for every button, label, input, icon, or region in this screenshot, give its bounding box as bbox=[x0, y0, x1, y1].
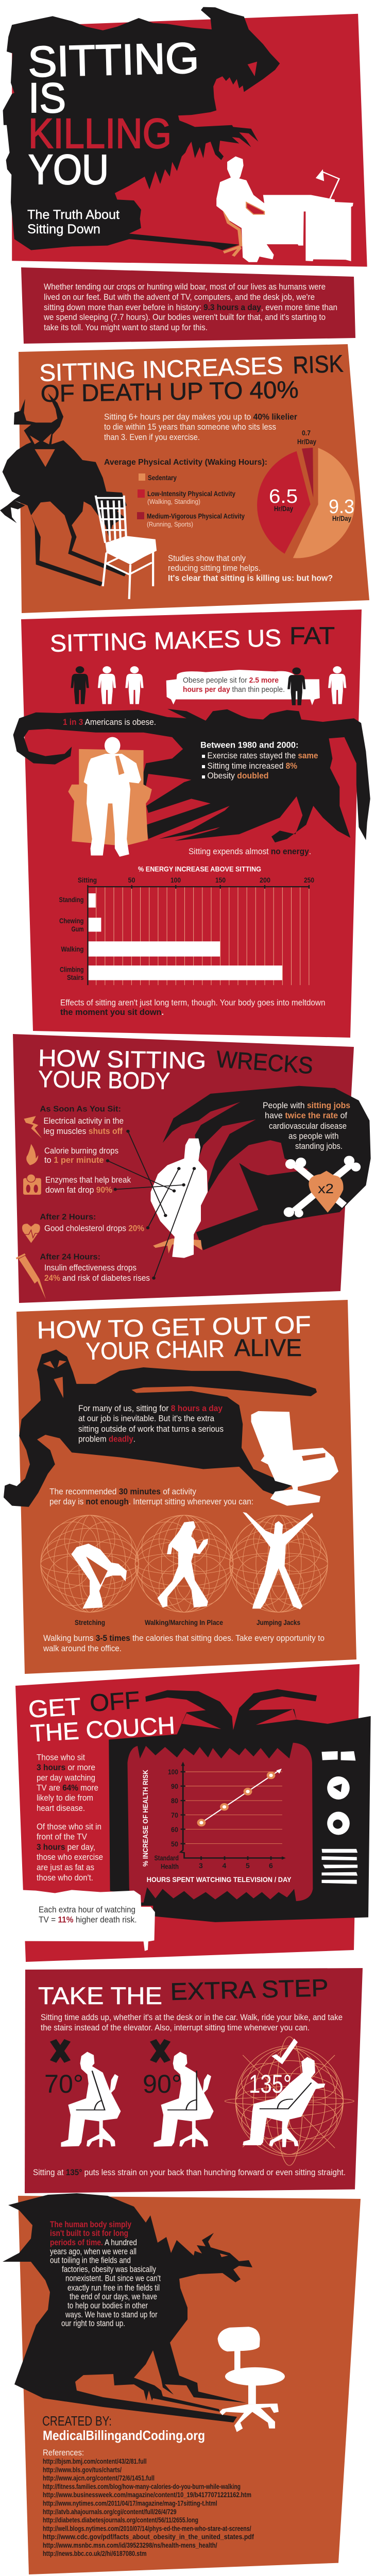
dragon text: isn't built to sit for long bbox=[50, 2229, 128, 2238]
chart: energy increase labels: Climbing bbox=[60, 965, 83, 974]
text: exercise: those who don't. bbox=[37, 1873, 93, 1883]
dragon text bbox=[50, 2220, 161, 2328]
references: http://www.msnbc.msn.com/id/39523298/ns/health-mens_health/ bbox=[43, 2541, 217, 2549]
pie: medium-vigorous bbox=[302, 448, 313, 498]
title text: SITTING bbox=[27, 33, 199, 86]
references: http://www.cdc.gov/pdf/facts_about_obesity_in_the_united_states.pdf bbox=[43, 2533, 254, 2541]
text: three hours: heart disease. bbox=[37, 1804, 85, 1813]
chart: energy increase labels: % ENERGY INCREASE ABOVE SITTING bbox=[138, 866, 261, 873]
illustration: arm gap bbox=[246, 202, 264, 214]
section heading bbox=[38, 1974, 329, 2009]
pie: low intensity bbox=[257, 451, 311, 554]
panel: sitting makes us fat bbox=[13, 609, 370, 1038]
text: walking burns bbox=[43, 1634, 325, 1653]
icon: lightning bbox=[24, 1116, 42, 1139]
icon: syringe bbox=[16, 1254, 46, 1299]
illustration: black claw bbox=[163, 1086, 371, 1250]
chart: energy increase labels: Gum bbox=[71, 925, 83, 933]
dragon text: periods of time. A hundred bbox=[50, 2238, 137, 2247]
intro text bbox=[41, 2013, 343, 2032]
text: after 2 hours bbox=[40, 1213, 144, 1233]
legend: (Running, Sports) bbox=[147, 520, 193, 528]
body text: likelihood: than 3. Even if you exercise. bbox=[104, 433, 200, 442]
pattern: three spirograph circles bbox=[41, 1515, 328, 1612]
subtitle: Sitting Down bbox=[27, 222, 100, 236]
figure: stretching bbox=[71, 1544, 127, 1608]
text: three hours: per day watching bbox=[37, 1773, 95, 1783]
text: walking burns: Walking burns 3-5 times the calories that sitting does. Take every opportunity to bbox=[43, 1634, 325, 1643]
text: three hours: likely to die from bbox=[37, 1793, 93, 1803]
references: http://www.businessweek.com/magazine/content/10_19/b4177071221162.htm bbox=[43, 2491, 251, 2499]
text: sitting jobs: cardiovascular disease bbox=[269, 1122, 347, 1131]
panel: title hero bbox=[3, 7, 367, 267]
pie labels: 0.7 bbox=[302, 429, 311, 437]
illustration: crossbones bbox=[284, 1156, 361, 1217]
exercise labels bbox=[75, 1618, 300, 1626]
references: http://fitness.families.com/blog/how-many-calories-do-you-burn-while-walking bbox=[43, 2483, 241, 2490]
man's bullet list on beast bbox=[200, 741, 318, 781]
title text bbox=[27, 33, 199, 193]
illustration: desk lamp bbox=[316, 169, 339, 199]
section heading: WRECKS bbox=[215, 1045, 314, 1079]
text: eight hours a day: at our job is inevitable. But it's the extra bbox=[78, 1414, 215, 1423]
line chart bbox=[181, 1761, 286, 1860]
references bbox=[43, 2448, 254, 2557]
man's bullet list on beast: Exercise rates stayed the same bbox=[207, 751, 318, 760]
illustration: black scorpion beast bbox=[13, 709, 370, 842]
text: exercise: are just as fat as bbox=[37, 1863, 94, 1872]
bar: standing bbox=[89, 893, 96, 908]
panel: take the extra step bbox=[25, 1968, 363, 2193]
section heading: OFF bbox=[89, 1686, 141, 1717]
chart: energy increase labels: Stairs bbox=[67, 973, 84, 981]
illustration: white chair bbox=[96, 496, 157, 599]
body text: studies: reducing sitting time helps. bbox=[168, 564, 261, 573]
pie labels bbox=[269, 429, 354, 522]
panel: closing and credits bbox=[3, 2193, 361, 2574]
intro text bbox=[43, 282, 337, 332]
angle labels: 70° bbox=[44, 2070, 83, 2098]
section heading bbox=[37, 1311, 311, 1365]
pie labels: 9.3 bbox=[329, 496, 354, 518]
angle labels: 90° bbox=[143, 2070, 182, 2098]
subtitle bbox=[27, 208, 120, 236]
white drip callout bbox=[22, 1890, 155, 1951]
text: sitting jobs bbox=[263, 1101, 350, 1151]
section heading: TAKE THE bbox=[38, 1982, 162, 2009]
angle labels: 135° bbox=[249, 2070, 292, 2098]
dragon text: The human body simply bbox=[50, 2220, 132, 2229]
dragon text: our right to stand up. bbox=[61, 2319, 125, 2328]
tv screen bbox=[127, 1743, 313, 1903]
credit: CREATED BY: bbox=[42, 2413, 112, 2429]
body text: studies: Studies show that only bbox=[168, 554, 246, 563]
dragon text: nonexistent. But since we can't bbox=[65, 2274, 161, 2283]
text: thirty minutes: The recommended 30 minutes of activity bbox=[49, 1487, 197, 1496]
chart labels: HOURS SPENT WATCHING TELEVISION / DAY bbox=[147, 1875, 292, 1884]
pie labels: 6.5 bbox=[269, 486, 298, 507]
section heading bbox=[38, 1044, 314, 1094]
illustration: seated man bbox=[84, 737, 141, 857]
body text: studies bbox=[168, 554, 333, 583]
pie labels: Hr/Day bbox=[297, 437, 316, 446]
chart: energy increase labels bbox=[59, 866, 314, 981]
text: as soon as you sit: to 1 per minute bbox=[44, 1156, 104, 1165]
dragon text: the end of our days, we have bbox=[70, 2292, 157, 2301]
chart labels: 6 bbox=[269, 1861, 273, 1870]
chart labels: Standard bbox=[155, 1854, 179, 1862]
chart labels: 50 bbox=[171, 1840, 178, 1848]
legend: Low-Intensity Physical Activity bbox=[147, 489, 235, 498]
text: exercise bbox=[37, 1822, 103, 1883]
text: three hours: 3 hours or more bbox=[37, 1763, 95, 1772]
intro text: the stairs instead of the elevator. Also, interrupt sitting time whenever you can. bbox=[41, 2023, 310, 2032]
text: as soon as you sit: Electrical activity in the bbox=[43, 1116, 124, 1126]
text: as soon as you sit: As Soon As You Sit: bbox=[40, 1105, 121, 1114]
text: three hours: Those who sit bbox=[37, 1753, 85, 1762]
chart: energy increase labels: 200 bbox=[260, 876, 270, 884]
pie labels: Hr/Day bbox=[332, 514, 351, 522]
chart labels: 60 bbox=[171, 1825, 178, 1834]
intro text: take its toll. You might want to stand up for this. bbox=[44, 323, 208, 332]
chart labels: 90 bbox=[171, 1782, 178, 1790]
text: after 2 hours: After 2 Hours: bbox=[40, 1213, 96, 1222]
body text: effects: Effects of sitting aren't just long term, though. Your body goes into meltdown bbox=[60, 998, 326, 1008]
section heading: EXTRA STEP bbox=[170, 1974, 329, 2005]
stat: obese people sit more: hours per day than thin people. bbox=[183, 686, 285, 694]
intro text: we spend sleeping (7.7 hours). Our bodies weren't built for that, and it's starting to bbox=[43, 313, 326, 322]
label: x2: x2 bbox=[318, 1181, 334, 1196]
illustration: office chair bbox=[218, 2327, 285, 2432]
figure: straight sitter bbox=[154, 2052, 214, 2147]
panel: how sitting wrecks your body bbox=[13, 1034, 371, 1303]
text: sitting jobs: standing jobs. bbox=[295, 1142, 343, 1151]
text: eight hours a day bbox=[78, 1404, 224, 1444]
illustration: sofa bbox=[166, 670, 320, 705]
panel: get off the couch bbox=[15, 1664, 371, 1962]
section heading: OF DEATH UP TO 40% bbox=[40, 376, 299, 407]
text: sitting jobs: People with sitting jobs bbox=[263, 1101, 350, 1110]
exercise labels: Stretching bbox=[75, 1618, 105, 1626]
figure: walking bbox=[158, 1521, 208, 1607]
references: http://well.blogs.nytimes.com/2010/07/14/phys-ed-the-men-who-stare-at-screens/ bbox=[43, 2524, 251, 2532]
callout text: Each extra hour of watching bbox=[39, 1905, 135, 1914]
text: after 24 hours: After 24 Hours: bbox=[40, 1253, 100, 1262]
text: as soon as you sit bbox=[40, 1105, 131, 1195]
illustration: armchair bbox=[68, 749, 152, 846]
chart labels: 3 bbox=[199, 1861, 203, 1870]
chart axis and gridlines bbox=[87, 885, 310, 985]
title text: KILLING bbox=[28, 110, 172, 157]
illustration: desk chair bbox=[153, 1211, 202, 1253]
dragon text: years ago, when we were all bbox=[50, 2247, 137, 2257]
intro text: sitting down more than ever before in history: 9.3 hours a day, even more time than bbox=[44, 303, 337, 312]
dragon text: ways. We have to stand up for bbox=[65, 2310, 158, 2319]
stat: obese people sit more bbox=[183, 676, 285, 694]
man's bullet list on beast: Obesity doubled bbox=[207, 771, 269, 781]
text: eight hours a day: For many of us, sitting for 8 hours a day bbox=[78, 1404, 223, 1413]
legend heading: Average Physical Activity (Waking Hours): bbox=[104, 458, 267, 467]
references: References: bbox=[43, 2448, 84, 2458]
tv controls bbox=[321, 1751, 357, 1884]
references: http://bjsm.bmj.com/content/43/2/81.full bbox=[43, 2458, 147, 2465]
body text: effects bbox=[60, 998, 326, 1017]
pattern: spirograph bbox=[225, 2037, 354, 2165]
dragon text: exactly run free in the fields til bbox=[67, 2283, 160, 2293]
pie chart bbox=[257, 429, 355, 558]
references: http://atvb.ahajournals.org/cgi/content/full/26/4/729 bbox=[43, 2508, 177, 2516]
illustration: monster television bbox=[109, 1689, 371, 1922]
text: three hours: TV are 64% more bbox=[37, 1784, 98, 1793]
figure: jumping jacks bbox=[243, 1512, 313, 1609]
text: after 24 hours: Insulin effectiveness drops bbox=[44, 1263, 137, 1273]
illustration: office chair bbox=[224, 211, 254, 256]
chart labels: 70 bbox=[171, 1811, 178, 1819]
bar: walking bbox=[89, 941, 220, 957]
intro text: Sitting time adds up, whether it's at the desk or in the car. Walk, ride your bike, and take bbox=[41, 2013, 343, 2022]
section heading: SITTING MAKES US bbox=[49, 624, 282, 657]
legend: Sedentary bbox=[148, 473, 177, 482]
chart labels: 80 bbox=[171, 1797, 178, 1805]
text: walking burns: walk around the office. bbox=[43, 1644, 122, 1653]
chart: energy increase labels: 50 bbox=[128, 876, 135, 884]
section heading: ALIVE bbox=[234, 1334, 302, 1361]
legend bbox=[137, 473, 245, 528]
panel: sitting increases risk of death bbox=[0, 344, 369, 613]
text: exercise: those who exercise bbox=[37, 1853, 103, 1862]
hero red background bbox=[3, 7, 367, 267]
stat: one in three: 1 in 3 Americans is obese. bbox=[63, 718, 156, 727]
text: eight hours a day: sitting outside of work that turns a serious bbox=[78, 1425, 224, 1434]
illustration: black monster bbox=[3, 7, 280, 250]
illustration: black ghost bbox=[4, 1350, 317, 1507]
text: sitting jobs: have twice the rate of bbox=[265, 1111, 347, 1121]
chart: energy increase labels: 150 bbox=[215, 876, 226, 884]
text: 135 degrees: Sitting at 135° puts less strain on your back than hunching forward or even sitting straight. bbox=[33, 2168, 346, 2177]
icon: cross bbox=[153, 2040, 167, 2061]
man's bullet list on beast: Sitting time increased 8% bbox=[207, 761, 297, 771]
dragon text: to help our bodies in other bbox=[67, 2301, 148, 2311]
illustration: worker at desk bbox=[216, 156, 353, 262]
icon: cross bbox=[53, 2040, 67, 2061]
body text: likelihood bbox=[104, 412, 298, 442]
icon: check mark bbox=[271, 2039, 298, 2064]
text: as soon as you sit: leg muscles shuts off bbox=[43, 1127, 123, 1136]
chart: energy increase labels: Sitting bbox=[78, 876, 97, 884]
dragon text: factories, obesity was basically bbox=[62, 2265, 157, 2274]
title text: IS bbox=[28, 75, 66, 122]
section heading: RISK bbox=[292, 350, 344, 379]
text: as soon as you sit: Calorie burning drops bbox=[44, 1146, 118, 1156]
stat: obese people sit more: Obese people sit for 2.5 more bbox=[183, 676, 279, 685]
text: as soon as you sit: down fat drop 90% bbox=[45, 1185, 112, 1195]
body text: likelihood: Sitting 6+ hours per day makes you up to 40% likelier bbox=[104, 412, 298, 421]
angle labels bbox=[44, 2070, 292, 2098]
text: exercise: Of those who sit in bbox=[37, 1822, 101, 1832]
chart labels bbox=[141, 1768, 292, 1884]
bar: climbing stairs bbox=[89, 965, 282, 980]
chart: energy increase labels: 250 bbox=[304, 876, 314, 884]
section heading: GET bbox=[27, 1692, 81, 1723]
section heading: HOW SITTING bbox=[38, 1044, 207, 1074]
references: http://www.nytimes.com/2011/04/17/magazine/mag-17sitting-t.html bbox=[43, 2500, 217, 2507]
illustration: heart bbox=[309, 1171, 344, 1213]
man's bullet list on beast: Between 1980 and 2000: bbox=[200, 741, 299, 750]
icon: scale bbox=[23, 1174, 41, 1195]
text: eight hours a day: problem deadly. bbox=[78, 1434, 135, 1444]
body text: studies: It's clear that sitting is killing us: but how? bbox=[168, 574, 333, 583]
text: thirty minutes: per day is not enough. Interrupt sitting whenever you can: bbox=[49, 1497, 253, 1506]
references: http://news.bbc.co.uk/2/hi/6187080.stm bbox=[43, 2550, 147, 2557]
title text: YOU bbox=[28, 146, 109, 193]
chart labels: 5 bbox=[246, 1861, 250, 1870]
illustration: devil and chair bbox=[0, 393, 157, 599]
callout text bbox=[39, 1905, 137, 1925]
text: thirty minutes bbox=[49, 1487, 253, 1506]
panel: how to get out of your chair alive bbox=[4, 1300, 356, 1674]
illustration: white recliner bbox=[251, 1411, 338, 1506]
intro text: lived on our feet. But with the advent of TV, computers, and the desk job, we're bbox=[44, 293, 315, 302]
section heading: SITTING INCREASES bbox=[39, 351, 283, 386]
credit bbox=[42, 2413, 205, 2443]
section heading bbox=[27, 1686, 176, 1747]
figure: reclined sitter bbox=[243, 2057, 325, 2147]
text: sitting jobs: as people with bbox=[288, 1131, 339, 1141]
icon: flame bbox=[26, 1144, 38, 1165]
references: http://www.bls.gov/tus/charts/ bbox=[43, 2466, 122, 2473]
bar: chewing gum bbox=[89, 918, 101, 931]
body text: effects: the moment you sit down. bbox=[60, 1008, 164, 1017]
text: exercise: front of the TV bbox=[37, 1833, 87, 1842]
text: exercise: 3 hours per day, bbox=[37, 1843, 95, 1852]
pie: sedentary bbox=[293, 448, 355, 558]
text: after 2 hours: Good cholesterol drops 20% bbox=[44, 1224, 144, 1233]
chart labels: % INCREASE OF HEALTH RISK bbox=[141, 1770, 149, 1867]
icons: obese and thin person bbox=[287, 666, 346, 705]
icon: heart with pulse bbox=[22, 1224, 40, 1243]
text: after 24 hours bbox=[40, 1253, 150, 1283]
exercise labels: Jumping Jacks bbox=[257, 1618, 300, 1626]
text: three hours bbox=[37, 1753, 98, 1813]
panel: introduction bbox=[21, 267, 355, 344]
chart: energy increase labels: Chewing bbox=[59, 917, 83, 925]
section heading bbox=[39, 350, 344, 407]
chart: energy increase labels: Walking bbox=[61, 945, 83, 953]
section heading: THE COUCH bbox=[30, 1711, 176, 1747]
subtitle: The Truth About bbox=[27, 208, 120, 222]
intro text: Whether tending our crops or hunting wild boar, most of our lives as humans were bbox=[44, 282, 326, 292]
icons: one in three people bbox=[71, 666, 144, 704]
references: http://diabetes.diabetesjournals.org/content/56/11/2655.long bbox=[43, 2516, 198, 2524]
callout text: TV = 11% higher death risk. bbox=[39, 1916, 137, 1925]
chart: energy increase labels: 100 bbox=[171, 876, 181, 884]
chart labels: Health bbox=[161, 1862, 179, 1870]
references: http://www.ajcn.org/content/72/6/1451.full bbox=[43, 2475, 155, 2482]
illustration: horned devil bbox=[0, 393, 127, 586]
pie labels: Hr/Day bbox=[274, 504, 293, 513]
stat: energy: Sitting expends almost no energy. bbox=[189, 847, 311, 856]
figure: hunched sitter bbox=[61, 2052, 121, 2147]
credit: MedicalBillingandCoding.org bbox=[43, 2428, 205, 2443]
illustration: seated man bbox=[151, 1139, 208, 1258]
section heading: HOW TO GET OUT OF bbox=[37, 1311, 311, 1344]
body text: likelihood: to die within 15 years than someone who sits less bbox=[104, 422, 276, 432]
chart labels: 100 bbox=[168, 1768, 178, 1776]
text: after 24 hours: 24% and risk of diabetes rises bbox=[44, 1274, 150, 1283]
chart: energy increase labels: Standing bbox=[59, 895, 83, 904]
chart labels: 4 bbox=[223, 1861, 227, 1870]
exercise labels: Walking/Marching In Place bbox=[145, 1618, 223, 1626]
section heading: YOUR BODY bbox=[38, 1065, 171, 1094]
dragon text: out toiling in the fields and bbox=[50, 2256, 131, 2265]
arrows: body effects bbox=[106, 1130, 196, 1280]
illustration: black dragon bbox=[3, 2193, 252, 2422]
legend: Medium-Vigorous Physical Activity bbox=[147, 512, 245, 520]
text: as soon as you sit: Enzymes that help break bbox=[45, 1176, 131, 1185]
section heading: FAT bbox=[289, 622, 335, 649]
section heading: YOUR CHAIR bbox=[86, 1334, 225, 1365]
legend: (Walking, Standing) bbox=[147, 498, 200, 505]
